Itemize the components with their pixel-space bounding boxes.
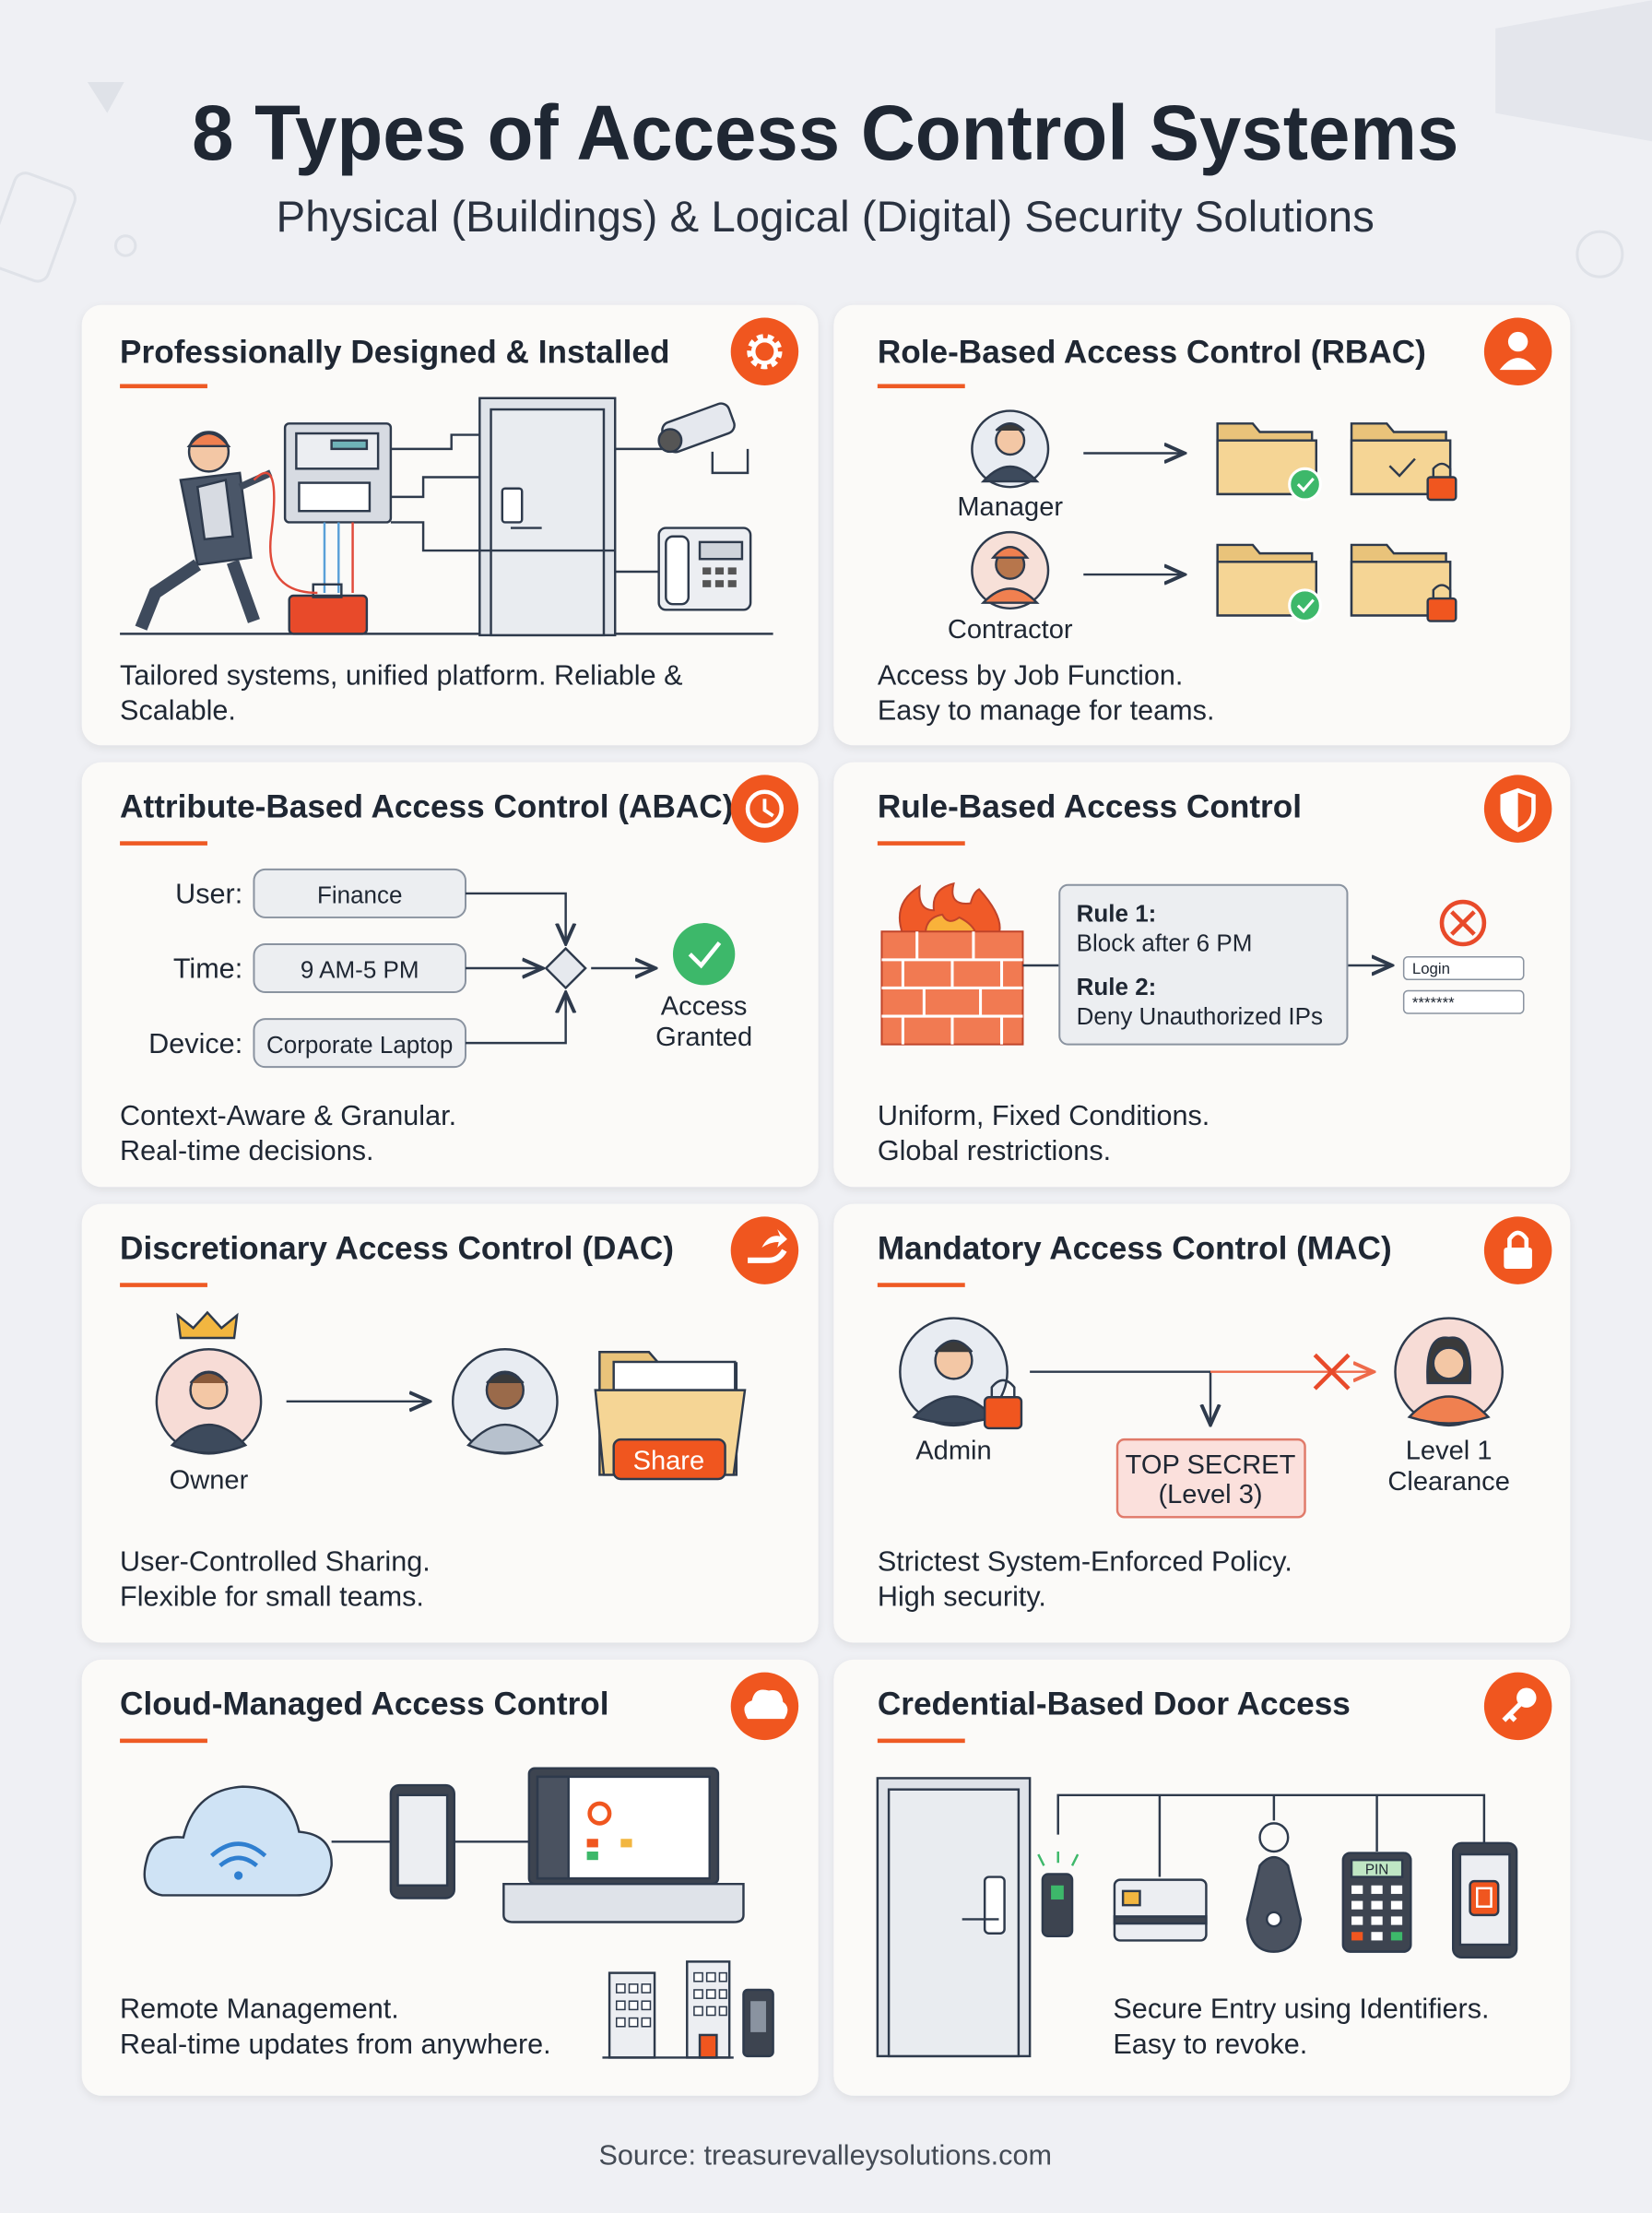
panel: cloud-managed [82,1660,819,2096]
heading: Credential-Based Door Access [878,1686,1351,1722]
text block: Flexible for small teams. [120,1581,424,1613]
text block: Context-Aware & Granular. [120,1100,456,1131]
panel: RBAC: Manager [957,492,1063,522]
text block: Real-time decisions. [120,1135,374,1166]
heading: Professionally Designed & Installed [120,335,669,371]
attribute flow: Finance [317,882,402,909]
subtitle: Physical (Buildings) & Logical (Digital) Security Solutions [277,193,1375,242]
panel: RBAC: Contractor [948,615,1073,645]
firewall [881,883,1022,1045]
panel: MAC: (Level 3) [1158,1480,1263,1509]
panel: Rule-based: Deny Unauthorized IPs [1077,1002,1323,1030]
cloud devices [145,1769,773,2057]
icon: user [1484,318,1552,385]
text block: Uniform, Fixed Conditions. [878,1100,1210,1131]
attribute flow: Corporate Laptop [266,1031,453,1059]
icon: lock [1484,1216,1552,1284]
text block: Global restrictions. [878,1135,1111,1166]
flow [900,1319,1503,1517]
icon: shield [1484,775,1552,843]
text block: User-Controlled Sharing. [120,1545,431,1577]
icon: share hand [731,1216,798,1284]
panel: credential-based: PIN [1365,1862,1388,1877]
text block: Access by Job Function. [878,659,1183,691]
panel: Rule-based: Rule 2: [1077,973,1156,1000]
panel: Rule-based [833,763,1570,1187]
panel: DAC [82,1204,819,1643]
panel: professionally designed [82,305,819,745]
attribute flow: 9 AM-5 PM [301,956,419,984]
illustration: installer with devices [120,398,773,635]
heading: Cloud-Managed Access Control [120,1686,609,1722]
heading: Mandatory Access Control (MAC) [878,1230,1392,1266]
source: Source: treasurevalleysolutions.com [599,2140,1052,2172]
icon: key [1484,1673,1552,1740]
panel: Rule-based: Rule 1: [1077,900,1156,928]
owner [157,1312,745,1479]
panel: DAC: Owner [170,1466,249,1496]
panel: MAC: Admin [915,1437,992,1466]
text block: Strictest System-Enforced Policy. [878,1545,1292,1577]
icon: clock [731,775,798,843]
title: 8 Types of Access Control Systems [192,89,1458,176]
panel: RBAC [833,305,1570,745]
text block: High security. [878,1581,1046,1613]
manager row [972,411,1456,500]
contractor row [972,532,1456,621]
panel: Rule-based: Block after 6 PM [1077,929,1252,957]
panel: DAC: Share [633,1446,704,1475]
attribute flow: Device: [148,1028,242,1059]
panel: MAC: TOP SECRET [1126,1450,1296,1480]
panel: MAC: Clearance [1387,1467,1510,1497]
text block: Secure Entry using Identifiers. [1113,1994,1490,2025]
text block: Easy to manage for teams. [878,695,1214,727]
heading: Role-Based Access Control (RBAC) [878,335,1426,371]
text block: Remote Management. [120,1994,399,2025]
heading: Discretionary Access Control (DAC) [120,1230,674,1266]
heading: Rule-Based Access Control [878,788,1302,824]
decorative shapes [0,0,1652,284]
text block: Tailored systems, unified platform. Reliable & [120,659,683,691]
door and credentials [878,1778,1516,2056]
attribute flow [148,870,752,1067]
icon: cloud [731,1673,798,1740]
attribute flow: Granted [655,1023,752,1052]
panel: credential-based [833,1660,1570,2096]
panel: Rule-based: Login [1412,960,1450,977]
attribute flow: User: [175,879,242,910]
panel: Rule-based: ******* [1412,994,1455,1012]
panel: ABAC [82,763,819,1187]
text block: Easy to revoke. [1113,2029,1307,2060]
icon: gear [731,318,798,385]
heading: Attribute-Based Access Control (ABAC) [120,788,733,824]
attribute flow: Time: [173,953,242,985]
panel: MAC: Level 1 [1406,1437,1492,1466]
text block: Scalable. [120,695,236,727]
attribute flow: Access [661,992,747,1022]
panel: MAC [833,1204,1570,1643]
text block: Real-time updates from anywhere. [120,2029,551,2060]
